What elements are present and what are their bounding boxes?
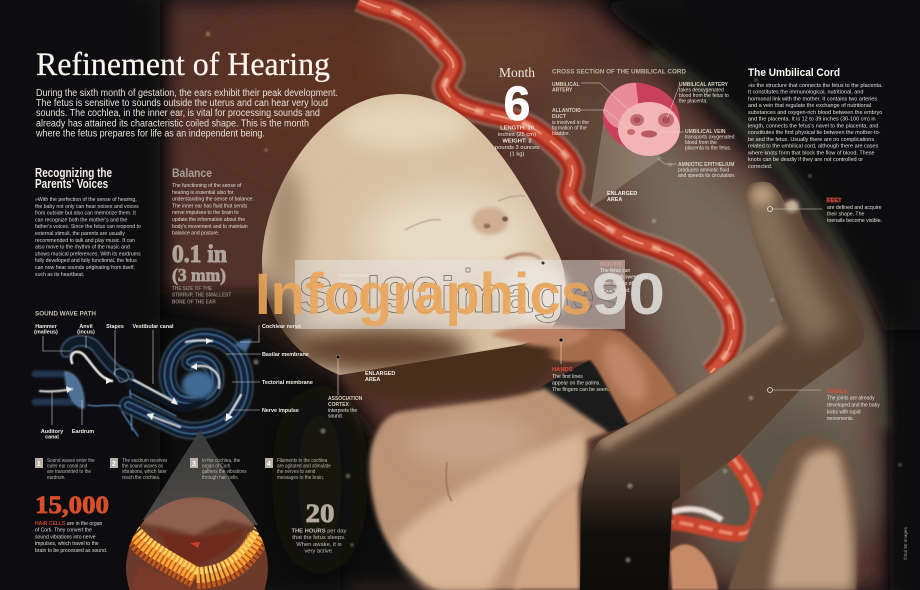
heading: Parents' Voices: [35, 178, 108, 191]
step 2: [110, 458, 168, 481]
callout: feet: toenails become visible.: [827, 218, 882, 224]
body text: can recognize both the mother's and the: [35, 217, 127, 224]
body text: external stimuli, the parents are usually: [35, 231, 125, 237]
stat: hair cells: brain to be processed as sound.: [35, 548, 108, 554]
body text: The inner ear has fluid that sends: [172, 203, 248, 210]
heading: SOUND WAVE PATH: [35, 310, 96, 318]
stat: hair cells: [35, 492, 109, 554]
stat caption: BONE OF THE EAR: [172, 299, 216, 306]
left labels: DUCT: [552, 114, 566, 120]
stat: hours of sleep: [291, 499, 347, 555]
body text: shows musical preferences. With its eardrums: [35, 251, 141, 258]
fetus: hand at chin: [490, 324, 590, 347]
left labels: ALLANTOIC: [552, 108, 581, 114]
umbilical cord lower: [672, 458, 758, 534]
body text: constitutes the first physical tie between the mother-to-: [748, 130, 881, 136]
right labels: blood from the fetus to: [679, 93, 729, 99]
fetus: head: [262, 94, 566, 375]
callout: primary auditory cortex: receives sound: [339, 273, 373, 279]
callout: knees: [768, 388, 880, 422]
labels: Stapes: [106, 324, 124, 330]
body text: »is the structure that connects the fetus to the placenta.: [748, 83, 883, 89]
step 1: Sound waves enter the: [47, 458, 95, 464]
enlargement cone: [143, 430, 258, 525]
callout: association cortex: sound.: [328, 414, 343, 420]
body text: update the information about the: [172, 217, 245, 223]
callout: knees: KNEES: [827, 389, 847, 395]
step 1: are transmitted to the: [47, 469, 91, 475]
right labels: transports oxygenated: [685, 134, 735, 140]
body text: nerve impulses to the brain to: [172, 210, 239, 216]
callout: knees: movements.: [827, 416, 854, 422]
month block: WEIGHT: 2: [502, 138, 532, 144]
stat: metric size: (3 mm): [172, 265, 226, 286]
body text: »With the perfection of the sense of hearing,: [35, 197, 137, 203]
step 3: through hair cells.: [202, 474, 239, 481]
callout: feet: FEET: [827, 198, 842, 204]
step 4: [265, 458, 331, 481]
step 2: 2: [112, 461, 116, 468]
enlarged area cone: [590, 112, 662, 208]
body text: fully developed and fully functional, the fetus: [35, 258, 137, 264]
step 1: outer ear canal and: [47, 463, 87, 470]
stat: hair cells: are in the organ: [65, 521, 102, 527]
fetus: face features: [405, 196, 567, 320]
watermark: 90: [592, 262, 665, 327]
right labels: blood from the: [685, 140, 717, 146]
fetus: dark triangle beneath the arm: [535, 358, 630, 432]
watermark: Infographics: [255, 262, 592, 327]
stat: hair cells: of Corti. They convert the: [35, 527, 92, 534]
callout: mouth and taste: amniotic fluid.: [600, 288, 631, 294]
left labels: ARTERY: [552, 88, 573, 94]
right labels: placenta to the fetus.: [685, 146, 731, 152]
fetus: neck shadow: [343, 331, 553, 400]
left labels: formation of the: [552, 126, 587, 132]
labels: Anvil: [79, 324, 93, 330]
stat: hair cells: HAIR CELLS: [35, 521, 66, 527]
intro text: The fetus is sensitive to sounds outside the uterus and can hear very loud: [36, 98, 328, 109]
body text: such as its heartbeat.: [35, 272, 85, 278]
labels: Hammer: [35, 324, 58, 330]
step 4: the nerves to send: [277, 469, 316, 475]
enlarged area label: ENLARGED: [607, 191, 637, 197]
step 1: 1: [37, 461, 41, 468]
heading: The Umbilical Cord: [748, 67, 840, 79]
left labels: UMBILICAL: [552, 82, 580, 88]
enlarged area label: AREA: [607, 197, 622, 203]
stat: hours of sleep: very active.: [304, 549, 334, 555]
stat: hair cells: 15,000: [35, 492, 109, 519]
body text: and the placenta. It is 12 to 39 inches (30-100 cm) in: [748, 117, 876, 123]
intro text: where the fetus prepares for life as an independent being.: [35, 128, 265, 140]
fetus: forearm: [520, 329, 678, 424]
callout: hands: appear on the palms.: [552, 380, 601, 387]
labels right: Cochlear nerve: [262, 324, 301, 330]
umbilical cord upper: [360, 0, 734, 373]
callout: knees: The joints are already: [827, 395, 875, 402]
labels right: Nerve impulse: [262, 408, 299, 414]
labels right: Tectorial membrane: [262, 380, 313, 386]
callout: association cortex: CORTEX: [328, 402, 350, 408]
labels: Eardrum: [72, 429, 94, 435]
stat: hours of sleep: that the fetus sleeps.: [292, 535, 346, 541]
step 4: messages to the brain.: [277, 474, 324, 481]
body text: be and the fetus. Usually there are no complications: [748, 137, 874, 143]
right labels: takes deoxygenated: [679, 88, 724, 94]
leader lines: [43, 325, 261, 425]
right labels: produces amniotic fluid: [678, 168, 729, 174]
credit: ©Sol 90 Images: [902, 527, 908, 560]
callout: feet: their shape. The: [827, 211, 864, 218]
steps: [35, 458, 331, 481]
callout: association cortex: ASSOCIATION: [328, 396, 363, 402]
labels: canal: [45, 434, 59, 440]
right labels: UMBILICAL VEIN: [685, 129, 726, 135]
stat: hours of sleep: THE HOURS per day: [291, 528, 347, 534]
callout: hands: [552, 338, 609, 393]
body text: also move to the rhythm of the music and: [35, 244, 130, 251]
panel: balance: [172, 166, 254, 306]
labels: Vestibular canal: [132, 324, 174, 330]
left labels: is involved in the: [552, 120, 589, 126]
callout: knees: kicks with rapid: [827, 409, 861, 415]
panel: recognizing the parents' voices: [35, 167, 141, 278]
step 3: gathers the vibrations: [202, 469, 247, 475]
body text: can now hear sounds originating from itself,: [35, 265, 135, 271]
diagram: sound wave path: [34, 310, 313, 440]
labels right: Basilar membrane: [262, 352, 309, 358]
labels: (malleus): [34, 330, 58, 336]
body text: The functioning of the sense of: [172, 183, 242, 189]
month block: LENGTH: 10: [500, 126, 534, 132]
body text: balance and posture.: [172, 230, 220, 237]
label: enlarged area: AREA: [365, 377, 380, 383]
callout: knees: developed and the baby: [827, 402, 880, 409]
fetus: torso: [369, 388, 608, 590]
step 3: 3: [192, 461, 196, 468]
step 3: In the cochlea, the: [202, 458, 240, 464]
body text: It constitutes the immunological, nutritional, and: [748, 90, 863, 96]
right labels: the placenta.: [679, 98, 708, 104]
body text: corrected.: [748, 164, 773, 170]
month block: inches (25 cm): [498, 132, 536, 138]
intro text: already has attained its characteristic coiled shape. This is the month: [36, 118, 309, 130]
cross section: [603, 82, 680, 156]
body text: the baby not only can hear noises and voices: [35, 204, 139, 210]
body text: understanding the sense of balance.: [172, 196, 254, 203]
step 4: are agitated and stimulate: [277, 463, 331, 470]
callout: primary auditory cortex: PRIMARY: [339, 262, 363, 268]
step 4: Filaments in the cochlea: [277, 458, 327, 464]
step 2: The eardrum receives: [122, 458, 168, 464]
step 1: [35, 458, 95, 481]
callout: hands: HANDS: [552, 367, 573, 373]
month block: [495, 65, 539, 158]
callout: feet: [768, 197, 882, 224]
body text: related to the umbilical cord, although there are cases: [748, 144, 878, 150]
labels: Auditory: [41, 429, 63, 435]
callout: feet: are defined and acquire: [827, 205, 881, 211]
body text: knots can be deadly if they are not controlled or: [748, 157, 863, 163]
stat: stirrup size: 0.1 in: [172, 241, 227, 268]
month block: Month: [499, 65, 535, 80]
floating particles: [206, 32, 902, 562]
callout: hands: The first lines: [552, 374, 583, 380]
fetus: bent leg and foot: [570, 182, 864, 590]
callout: association cortex: interprets the: [328, 408, 357, 414]
body text: hormonal link with the mother. It contains two arteries: [748, 96, 877, 103]
callout: mouth and taste: distinguish sweet and: [600, 274, 648, 280]
labels: (incus): [77, 330, 95, 336]
micrograph: hair cells: [126, 497, 268, 590]
month block: (1 kg): [510, 152, 524, 158]
step 1: eardrum.: [47, 474, 66, 481]
callout: hands: The fingers can be seen.: [552, 387, 609, 393]
month block: pounds 3 ounces: [495, 145, 539, 151]
step 3: [190, 458, 247, 481]
right labels: AMNIOTIC EPITHELIUM: [678, 162, 734, 168]
panel: the umbilical cord: [747, 67, 883, 170]
right labels: and speeds its circulation.: [678, 173, 736, 179]
stat caption: STIRRUP, THE SMALLEST: [172, 292, 232, 299]
leader lines: [578, 83, 684, 164]
right labels: UMBILICAL ARTERY: [679, 82, 729, 88]
intro text: During the sixth month of gestation, the ears exhibit their peak development.: [36, 87, 338, 99]
callout: mouth and taste: bitter flavors of: [600, 281, 633, 287]
title: Refinement of Hearing: [36, 47, 330, 83]
heading: Balance: [172, 166, 212, 180]
callout: primary auditory cortex: signals.: [339, 279, 356, 285]
step 2: the sound waves as: [122, 463, 164, 470]
stat: hours of sleep: 20: [306, 499, 334, 528]
body text: and a vein that regulate the exchange of nutritional: [748, 103, 871, 109]
cross section of the umbilical cord: [552, 68, 736, 208]
ear drawing: [35, 337, 252, 436]
callout: mouth and taste: The fetus can: [600, 268, 631, 274]
step 2: reach the cochlea.: [122, 474, 160, 481]
intro text: sounds. The cochlea, in the inner ear, is vital for processing sounds and: [36, 108, 320, 119]
fetus: far limb at bottom: [670, 437, 857, 590]
left labels: bladder.: [552, 131, 570, 137]
label: enlarged area: ENLARGED: [365, 371, 395, 377]
stat: hair cells: impulses, which travel to the: [35, 541, 99, 547]
callout: mouth and taste: MOUTH: [600, 262, 621, 268]
stat: hair cells: sound vibrations into nerve: [35, 534, 96, 541]
step 2: vibrations, which later: [122, 469, 167, 475]
body text: from outside but also can memorize them. It: [35, 210, 136, 217]
step 3: organ of Corti: [202, 463, 230, 470]
watermark: Sol90images: [298, 267, 624, 323]
body text: where knots form that block the flow of blood. These: [747, 150, 875, 157]
step 4: 4: [267, 461, 271, 468]
month block: 6: [504, 78, 530, 131]
callout: primary auditory cortex: AUDITORY CORTEX: [339, 268, 388, 274]
heading: CROSS SECTION OF THE UMBILICAL CORD: [552, 68, 686, 76]
body text: hearing is essential also for: [172, 190, 234, 196]
body text: body's movement and to maintain: [172, 224, 248, 230]
callout: association cortex: [328, 355, 363, 420]
sound wave arrows: [40, 340, 241, 427]
body text: substances and oxygen-rich blood between the embryo: [748, 110, 882, 116]
stat caption: THE SIZE OF THE: [172, 286, 213, 292]
body text: length, connects the fetus's navel to the placenta, and: [748, 123, 878, 130]
stat: hours of sleep: When awake, it is: [296, 542, 342, 548]
body text: recommended to talk and play music. It can: [35, 238, 135, 244]
heading: Recognizing the: [35, 167, 112, 180]
body text: father's voices. Since the fetus can respond to: [35, 224, 141, 230]
